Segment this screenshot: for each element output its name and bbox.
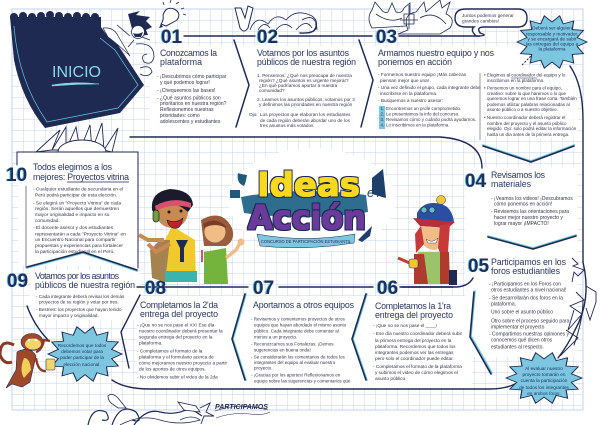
heading: participamos: foros estudiantiles (491, 266, 561, 276)
speech bubble: grandes cambios! (462, 18, 499, 24)
text: armamos: - Formemos nuestro equipo ¡Más cabezas (378, 72, 467, 77)
callout burst: votar (48, 327, 122, 381)
chevron 02-03 (359, 40, 373, 127)
text: aportamos: menos a un proyecto. (254, 334, 297, 340)
column: coordinador: hasta un día antes de la primera entrega. (487, 132, 569, 137)
text: todos elegimos: mayor originalidad e impacto en su (35, 212, 110, 218)
number 09: 09 (7, 271, 28, 292)
text: completamos 1ra: - Completamos el formato de la plataforma (373, 364, 462, 369)
text: aportamos: equipo sobre las sugerencias y comentarios que (254, 378, 351, 384)
number 06: 06 (377, 278, 398, 299)
step 04 (465, 146, 574, 227)
number 08: 08 (145, 278, 166, 299)
text: revisamos: cómo ponemos en acción! (494, 202, 552, 208)
step 08 (137, 278, 227, 380)
ornament: bird (108, 394, 126, 408)
number 03: 03 (376, 27, 397, 48)
text: votamos: Ojo: (249, 112, 258, 117)
logo word ideas: Ideas (257, 165, 360, 204)
speech bubble: Juntos podemos generar (462, 13, 514, 18)
heading: todos elegimos: Todos elegimos a los (33, 162, 113, 172)
column: coordinador: nombre del proyecto y el asunto público (487, 121, 567, 126)
text: completamos 1ra: - ¡Que no se nos pase el ____! (373, 323, 437, 328)
text: completamos 2da: plataforma y el formulario acerca de (139, 354, 214, 360)
chevron: 09-10 (27, 252, 137, 270)
text: conozcamos: - ¡Descubrimos cómo participar (157, 74, 227, 80)
text: todos elegimos: la participación estudiantil en el Perú. (35, 249, 114, 255)
text: aportamos: proyecto. (254, 366, 273, 370)
text: participamos: - Se desarrollarán dos foros en la (489, 296, 563, 302)
text: conozcamos: adolescentes y estudiantes (160, 119, 221, 125)
text: votamos: 2. Leamos los asuntos públicos, votamos por 3 (257, 97, 355, 102)
text: completamos 2da: nuestro coordinador deberá presentar la (139, 328, 223, 334)
number 10: 10 (6, 165, 27, 186)
list: asesor steps: 2. (380, 112, 384, 116)
text: votamos: comunidad? (259, 88, 285, 93)
decoration: sunburst below inicio (36, 123, 118, 152)
heading: votamos: Votamos por los asuntos (257, 48, 350, 58)
step 05 (468, 236, 576, 350)
text: completamos 2da: - No olvidemos subir el video de la 2da (137, 374, 218, 380)
column: coordinador: inscribimos en la plataforma. (487, 78, 544, 83)
number 02: 02 (257, 27, 278, 48)
list: asesor steps: Lo inscribimos en la plataforma. (386, 122, 450, 128)
heading: armamos: Armamos nuestro equipo y nos (378, 48, 495, 58)
text: aportamos: - Se considerarán los comentarios de todos los (251, 354, 346, 360)
step 03 (376, 27, 495, 129)
callout burst: coordinador (517, 16, 587, 68)
heading: aportamos: Aportamos a otros equipos (253, 300, 355, 310)
text: participamos: Uno sobre el asunto público (491, 310, 553, 316)
text: completamos 1ra: - Ese día nuestro coordinador deberá subir (373, 331, 463, 336)
text: votamos asuntos: mayor impacto y originalidad. (39, 313, 99, 318)
text: votamos: ¿En qué podríamos aportar a nuestra (259, 83, 338, 88)
banner: participamos: PARTICIPAMOS (215, 402, 268, 411)
text: aportamos: - Revisemos y comentemos proyectos de otros (251, 316, 346, 322)
text: completamos 1ra: integrantes podemos ver las entregas (375, 350, 454, 355)
text: revisamos: hacer mejor nuestro proyecto y (494, 215, 563, 221)
text: todos elegimos: Perú podrá participar de esta elección. (35, 192, 117, 198)
ornament: bottom swirls (88, 408, 202, 425)
logo: ideas en accion (228, 148, 396, 252)
callout burst: evaluar foros: Al evaluar nuestro (525, 366, 563, 371)
text: votamos asuntos: - Bestries: los proyectos que hayan tenido (36, 307, 122, 312)
character: girl (201, 216, 244, 284)
text: conozcamos: prioridades: como (160, 113, 200, 119)
callout burst: evaluar foros: de todos los integrantes (519, 385, 570, 390)
heading: completamos 1ra: entrega del proyecto (375, 310, 453, 320)
text: participamos: estudiantes al respecto. (491, 344, 544, 350)
text: completamos 2da: segunda entrega del proyecto en la (139, 334, 213, 340)
text: completamos 2da: cómo mejoramos nuestro proyecto a partir (139, 360, 227, 366)
speech bubble (455, 9, 527, 36)
step 02 (249, 27, 356, 128)
ornament with hands (369, 0, 452, 34)
banner: participamos (200, 402, 270, 424)
chevron: 03-04 (483, 146, 574, 162)
step 01 (157, 27, 227, 125)
ornament with peace hand (235, 6, 317, 33)
heading: inicio: INICIO (52, 64, 101, 81)
logo ribbon (257, 234, 355, 248)
text: votamos: de cada región deberán abordar uno de los (260, 118, 351, 123)
arrow: dashed to burst (522, 49, 538, 65)
heading: votamos: públicos de nuestra región (257, 57, 356, 67)
text: completamos 2da: plataforma. (139, 340, 162, 346)
heading: conozcamos: Conozcamos la (160, 48, 217, 58)
list: asesor steps: Revisamos cómo y cuándo podrá ayudarnos. (386, 117, 476, 122)
chevron: 04-05 (488, 236, 576, 249)
step 10 (6, 162, 137, 270)
number 07: 07 (253, 278, 274, 299)
list: asesor steps: Encontremos un profe comprometido. (386, 106, 461, 111)
icon: rocket (358, 226, 372, 242)
text: completamos 1ra: la primera entrega del proyecto en la (375, 338, 452, 343)
heading: completamos 1ra: Completamos la 1'ra (375, 301, 451, 311)
text: completamos 1ra: plataforma. Recordemos que todos los (375, 344, 456, 349)
text: todos elegimos: un Encuentro Nacional para compartir (35, 237, 116, 243)
heading: completamos 2da: entrega del proyecto (140, 309, 218, 319)
column: coordinador: elegido. Ojo: solo podrá editar la información (487, 126, 577, 131)
text: armamos: - Una vez definido el grupo, cada integrante debe (378, 85, 481, 90)
heading: revisamos: materiales (491, 179, 532, 189)
heading: votamos asuntos: Votamos por los asuntos (35, 271, 120, 281)
step 09 (7, 271, 135, 318)
text: completamos 2da: de los aportes de otros equipos. (139, 366, 206, 372)
callout burst: evaluar foros: cuenta la participación (521, 378, 568, 383)
connector line 03 to bubble (399, 30, 481, 36)
text: completamos 1ra: y subimos el video de cómo elegimos el (375, 370, 458, 375)
list: asesor steps: Le presentamos la info del concurso. (386, 112, 460, 116)
text: participamos: Otro sobre el proceso seguido para (491, 318, 570, 324)
text: aportamos: sugerencias en buena onda! (254, 348, 311, 352)
heading: revisamos: Revisamos los (491, 170, 546, 180)
text: todos elegimos: región. Serán aquellos que demuestren (35, 206, 119, 212)
panel: inicio (10, 11, 144, 128)
column: coordinador: • Elegimos al coordinador del equipo y lo (484, 72, 566, 78)
list: asesor steps: 3. (380, 117, 384, 122)
text: aportamos: - ¡Gracias por los aportes! Reflexionamos en (251, 372, 341, 378)
connector line 02-03 (279, 35, 372, 37)
list: asesor steps (379, 106, 476, 129)
callout burst: votar: debemos votar para (61, 349, 103, 354)
text: participamos: - ¡Participamos en los Foros con (489, 282, 561, 288)
text: aportamos: - Reconozcamos sus Fortalezas. ¡Demos (251, 342, 334, 346)
heading: armamos: ponemos en acción (378, 57, 452, 67)
text: conozcamos: prioritarios en nuestra región? (160, 101, 227, 107)
logo ribbon: CONCURSO DE PARTICIPACIÓN ESTUDIANTIL (261, 238, 351, 244)
heading: votamos asuntos: públicos de nuestra región (35, 280, 135, 290)
list: asesor steps: 1. (380, 106, 384, 111)
text: todos elegimos: - El docente asesor y dos estudiantes (33, 225, 114, 231)
icon: running boy character (103, 11, 154, 76)
heading: conozcamos: plataforma (160, 57, 202, 67)
character: boy with chullo hat (398, 196, 457, 287)
number 01: 01 (161, 27, 183, 48)
text: todos elegimos: comunidad. (35, 218, 60, 224)
heading: completamos 2da: Completamos la 2'da (140, 300, 218, 310)
column: coordinador: queremos lograr en una frase corta. También (487, 96, 577, 101)
text: completamos 1ra: asunto público. (375, 376, 407, 381)
callout burst: coordinador: responsable y motivador, (526, 32, 578, 36)
text: revisamos: lograr mayor ¡IMPACTO! (494, 221, 549, 227)
icon: megaphone (372, 169, 386, 198)
text: armamos: - Busquemos a nuestro asesor: (378, 98, 443, 103)
text: revisamos: - Revisemos las orientaciones para (491, 209, 569, 215)
text: aportamos: integrantes del equipo al evaluar nuestro (254, 360, 336, 365)
chevron: 05-06 (470, 292, 491, 374)
text: revisamos: - ¡Veamos los videos! ¡Descubramos (491, 196, 573, 202)
text: todos elegimos: propuestas y experiencias para fortalecer (35, 243, 123, 249)
text: conozcamos: Reflexionemos nuestras (160, 107, 214, 113)
text: armamos: piensan mejor que una! . (380, 78, 432, 83)
callout burst: coordinador: la plataforma (538, 46, 566, 52)
text: votamos: región? ¿Qué asuntos es urgente mejorar? (259, 78, 349, 83)
icon: monkey (0, 334, 55, 388)
chevron: 06-07 (352, 294, 366, 380)
main path lines (17, 66, 583, 389)
column: coordinador: asunto público o a nuestro objetivo. (487, 107, 558, 112)
text: votamos: tres asuntos más votados (260, 123, 314, 128)
callout burst: votar: elección nacional. (63, 362, 101, 367)
number 05: 05 (468, 256, 490, 277)
connector line 01-02 (184, 35, 255, 37)
callout burst: votar: poder participar de la (60, 355, 104, 360)
column: coordinador: podemos utilizar palabras relacionadas al (487, 102, 570, 107)
callout burst: evaluar foros: proyecto tomarán en (522, 372, 566, 377)
logo band (241, 191, 368, 217)
step 07 (251, 278, 355, 384)
text: votamos: y definimos las prioridades en nuestra región (259, 102, 353, 107)
icon: light bulb (159, 0, 186, 28)
chevron 01-02 (234, 40, 249, 127)
heading: todos elegimos: mejores: Proyectos vitrina (33, 172, 129, 182)
chevron: 08-09 (121, 295, 140, 368)
text: participamos: - Compartimos nuestras opiniones y (489, 332, 570, 338)
heading: participamos: Participamos en los (491, 257, 567, 267)
text: votamos asuntos: - Cada integrante deberá revisar los demás (36, 294, 125, 299)
text: participamos: implementar el proyecto (491, 324, 545, 330)
logo word en: en (367, 185, 384, 200)
ornament: vine and hands (558, 258, 596, 358)
text: todos elegimos: - Se elegirá un "Proyecto Vitrina" de cada (33, 200, 121, 206)
character: boy with headphones (139, 189, 197, 282)
text: aportamos: equipos que hayan abordado el mismo asunto (254, 322, 347, 328)
column: coordinador: • Pensemos un nombre para el equipo, (484, 86, 562, 90)
column: coordinador (480, 72, 577, 140)
text: participamos: conocemos qué dicen otros (491, 338, 553, 344)
column: coordinador: creativo: sobre lo que haremos o lo que (487, 91, 567, 96)
text: conozcamos: - ¿Qué asuntos públicos son (157, 96, 221, 102)
text: aportamos: público. Cada integrante debe comentar al (254, 328, 339, 334)
callout burst: evaluar foros: en ambos foros. (527, 391, 561, 396)
text: completamos 2da: - ¡Que no se nos pase el XX! Ese día (137, 322, 215, 328)
text: armamos: inscribirse en la plataforma. (380, 91, 437, 96)
text: todos elegimos: representarán a cada "Proyecto Vitrina" en (35, 232, 126, 238)
text: votamos: 1. Pensemos: ¿Qué nos preocupa de nuestra (257, 73, 352, 78)
text: votamos: Los proyectos que elaboran los estudiantes (260, 112, 351, 117)
text: todos elegimos: - Cualquier estudiante de secundaria en el (33, 186, 123, 192)
callout burst: votar: Recordemos que todos (58, 343, 107, 348)
text: conozcamos: - ¡Chequeemos las bases! (157, 88, 215, 94)
text: completamos 2da: - Completamos el formato de la (137, 348, 203, 354)
text: votamos asuntos: proyectos de su región y votar por tres. (39, 300, 119, 304)
callout burst: coordinador: las entregas del equipo a (526, 42, 579, 46)
text: participamos: plataforma. (491, 302, 516, 308)
number 04: 04 (465, 171, 487, 192)
callout burst: coordinador: y se encargará de subir (528, 36, 577, 42)
text: conozcamos: y qué podemos lograr! (160, 80, 210, 86)
text: participamos: otros estudiantes a nivel nacional! (491, 288, 566, 294)
step 06 (373, 278, 463, 381)
logo word accion: Acción (248, 198, 366, 237)
ornament: ship (178, 402, 200, 412)
callout burst: coordinador: Deberá ser alguien (532, 26, 572, 30)
icon: lightbulb (238, 173, 247, 186)
chevron: 07-08 (232, 294, 245, 380)
icon: fist (230, 190, 240, 198)
callout burst: evaluar foros (506, 353, 582, 403)
list: asesor steps: 4. (380, 122, 384, 128)
text: completamos 1ra: pero solo el coordinador puede editar. (375, 356, 454, 361)
column: coordinador: • Nuestro coordinador deberá registrar el (484, 115, 565, 120)
